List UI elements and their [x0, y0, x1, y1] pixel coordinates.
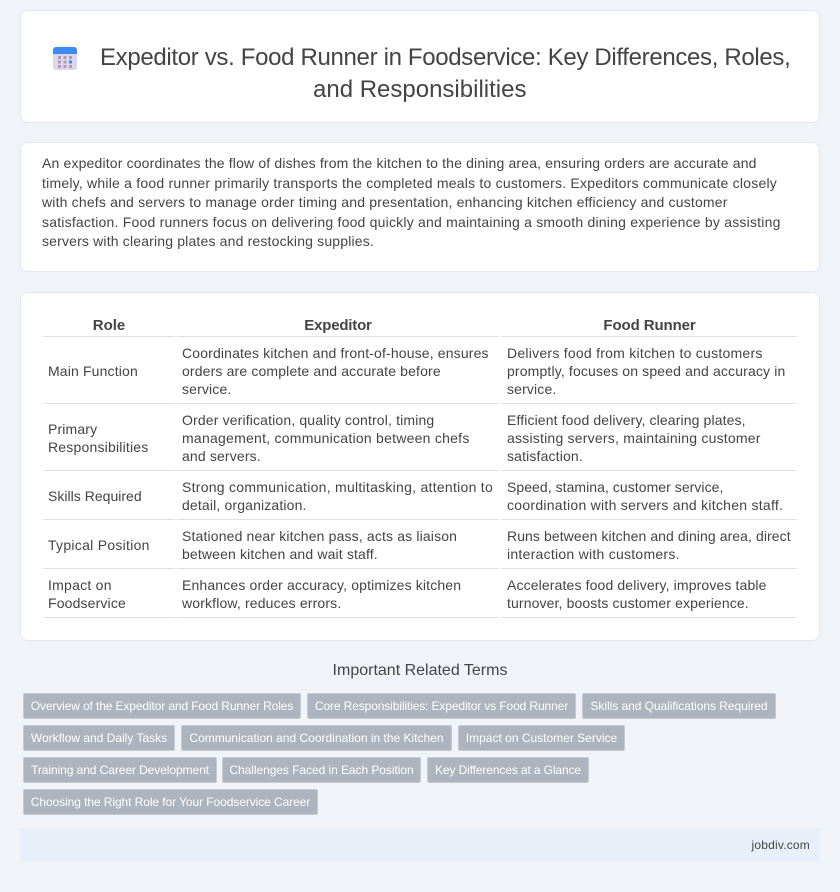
cell: expeditor responsibilities [182, 412, 470, 464]
text block: introduction [42, 155, 781, 249]
cell: expeditor position [182, 528, 457, 562]
tag: skills [582, 693, 776, 719]
tag: training [23, 757, 217, 783]
tag: training: Training and Career Development [31, 763, 209, 777]
tag: challenges [222, 757, 421, 783]
cell: expeditor skills: detail, organization. [182, 497, 307, 513]
tag: core responsibilities [307, 693, 576, 719]
tag: challenges: Challenges Faced in Each Position [229, 763, 414, 777]
tag: overview [23, 693, 301, 719]
cell: food runner main function [507, 345, 785, 397]
cell: food runner main function: service. [507, 381, 556, 397]
table header: Role: Role [93, 317, 125, 334]
cell: food runner skills: coordination with servers and kitchen staff. [507, 497, 783, 513]
tag: key differences [427, 757, 589, 783]
text block: introduction: satisfaction. Food runners focus on delivering food quickly and maintaining a smooth dining experience by assisting [42, 214, 781, 230]
row label: Skills Required: Skills Required [48, 488, 142, 504]
row label: Impact on Foodservice: Foodservice [48, 595, 126, 611]
cell: food runner position [507, 528, 791, 562]
cell: food runner responsibilities: Efficient food delivery, clearing plates, [507, 412, 746, 428]
cell: expeditor responsibilities: Order verification, quality control, timing [182, 412, 434, 428]
row label: Impact on Foodservice: Impact on [48, 577, 112, 593]
row label: Primary Responsibilities: Responsibilities [48, 439, 148, 455]
tag: workflow [23, 725, 175, 751]
text block: introduction: with chefs and servers to manage order timing and presentation, enhancing kitchen efficiency and customer [42, 194, 728, 210]
panel: title header [20, 10, 820, 123]
row label: Primary Responsibilities [48, 421, 148, 455]
cell: food runner main function: promptly, focuses on speed and accuracy in [507, 363, 785, 379]
tag: overview: Overview of the Expeditor and Food Runner Roles [31, 699, 293, 713]
cell: expeditor skills [182, 479, 493, 513]
tag: communication [181, 725, 452, 751]
text block: introduction: servers with clearing plates and restocking supplies. [42, 233, 374, 249]
cell: food runner position: interaction with customers. [507, 546, 680, 562]
cell: expeditor impact: workflow, reduces errors. [182, 595, 341, 611]
cell: expeditor impact: Enhances order accuracy, optimizes kitchen [182, 577, 461, 593]
text block: introduction: timely, while a food runner primarily transports the completed meals to customers. Expeditors communicate closely [42, 174, 777, 190]
icon: calendar [53, 47, 77, 70]
cell: food runner responsibilities [507, 412, 761, 464]
tag: key differences: Key Differences at a Glance [435, 763, 581, 777]
cell: food runner skills [507, 479, 783, 513]
footer bar [20, 828, 820, 862]
cell: expeditor main function: Coordinates kitchen and front-of-house, ensures [182, 345, 489, 361]
cell: food runner responsibilities: satisfaction. [507, 448, 583, 464]
row label: Impact on Foodservice [48, 577, 126, 611]
cell: expeditor responsibilities: and servers. [182, 448, 261, 464]
cell: food runner main function: Delivers food from kitchen to customers [507, 345, 763, 361]
title [100, 44, 790, 103]
tag: customer service [458, 725, 625, 751]
panel: introduction [20, 142, 820, 272]
cell: expeditor main function: service. [182, 381, 231, 397]
cell: expeditor position: between kitchen and wait staff. [182, 546, 378, 562]
cell: food runner impact: Accelerates food delivery, improves table [507, 577, 767, 593]
text block: introduction: An expeditor coordinates the flow of dishes from the kitchen to the dining area, ensuring orders are accurate and [42, 155, 757, 171]
heading: Important Related Terms: Important Related Terms [333, 662, 507, 679]
cell: food runner skills: Speed, stamina, customer service, [507, 479, 723, 495]
tag: customer service: Impact on Customer Service [466, 731, 617, 745]
row label: Main Function: Main Function [48, 363, 138, 379]
cell: expeditor main function [182, 345, 489, 397]
title: Expeditor vs. Food Runner in Foodservice: Key Differences, Roles, [100, 44, 790, 71]
footer text: jobdiv.com [752, 838, 810, 852]
table header: Expeditor: Expeditor [304, 317, 372, 334]
cell: food runner position: Runs between kitchen and dining area, direct [507, 528, 791, 544]
tag: core responsibilities: Core Responsibilities: Expeditor vs Food Runner [315, 699, 568, 713]
tag: workflow: Workflow and Daily Tasks [31, 731, 167, 745]
tag: choosing [23, 789, 318, 815]
table header: Food Runner: Food Runner [603, 317, 696, 334]
panel: comparison table [20, 292, 820, 641]
tag: communication: Communication and Coordination in the Kitchen [189, 731, 444, 745]
tag: choosing: Choosing the Right Role for Your Foodservice Career [31, 795, 310, 809]
cell: food runner impact: turnover, boosts customer experience. [507, 595, 749, 611]
row label: Typical Position: Typical Position [48, 537, 150, 553]
cell: expeditor skills: Strong communication, multitasking, attention to [182, 479, 493, 495]
row label: Primary Responsibilities: Primary [48, 421, 97, 437]
cell: food runner impact [507, 577, 767, 611]
cell: expeditor position: Stationed near kitchen pass, acts as liaison [182, 528, 457, 544]
cell: expeditor impact [182, 577, 461, 611]
cell: food runner responsibilities: assisting servers, maintaining customer [507, 430, 761, 446]
title: and Responsibilities [313, 76, 526, 103]
cell: expeditor main function: orders are complete and accurate before [182, 363, 441, 379]
tag: skills: Skills and Qualifications Required [590, 699, 768, 713]
cell: expeditor responsibilities: management, communication between chefs [182, 430, 470, 446]
